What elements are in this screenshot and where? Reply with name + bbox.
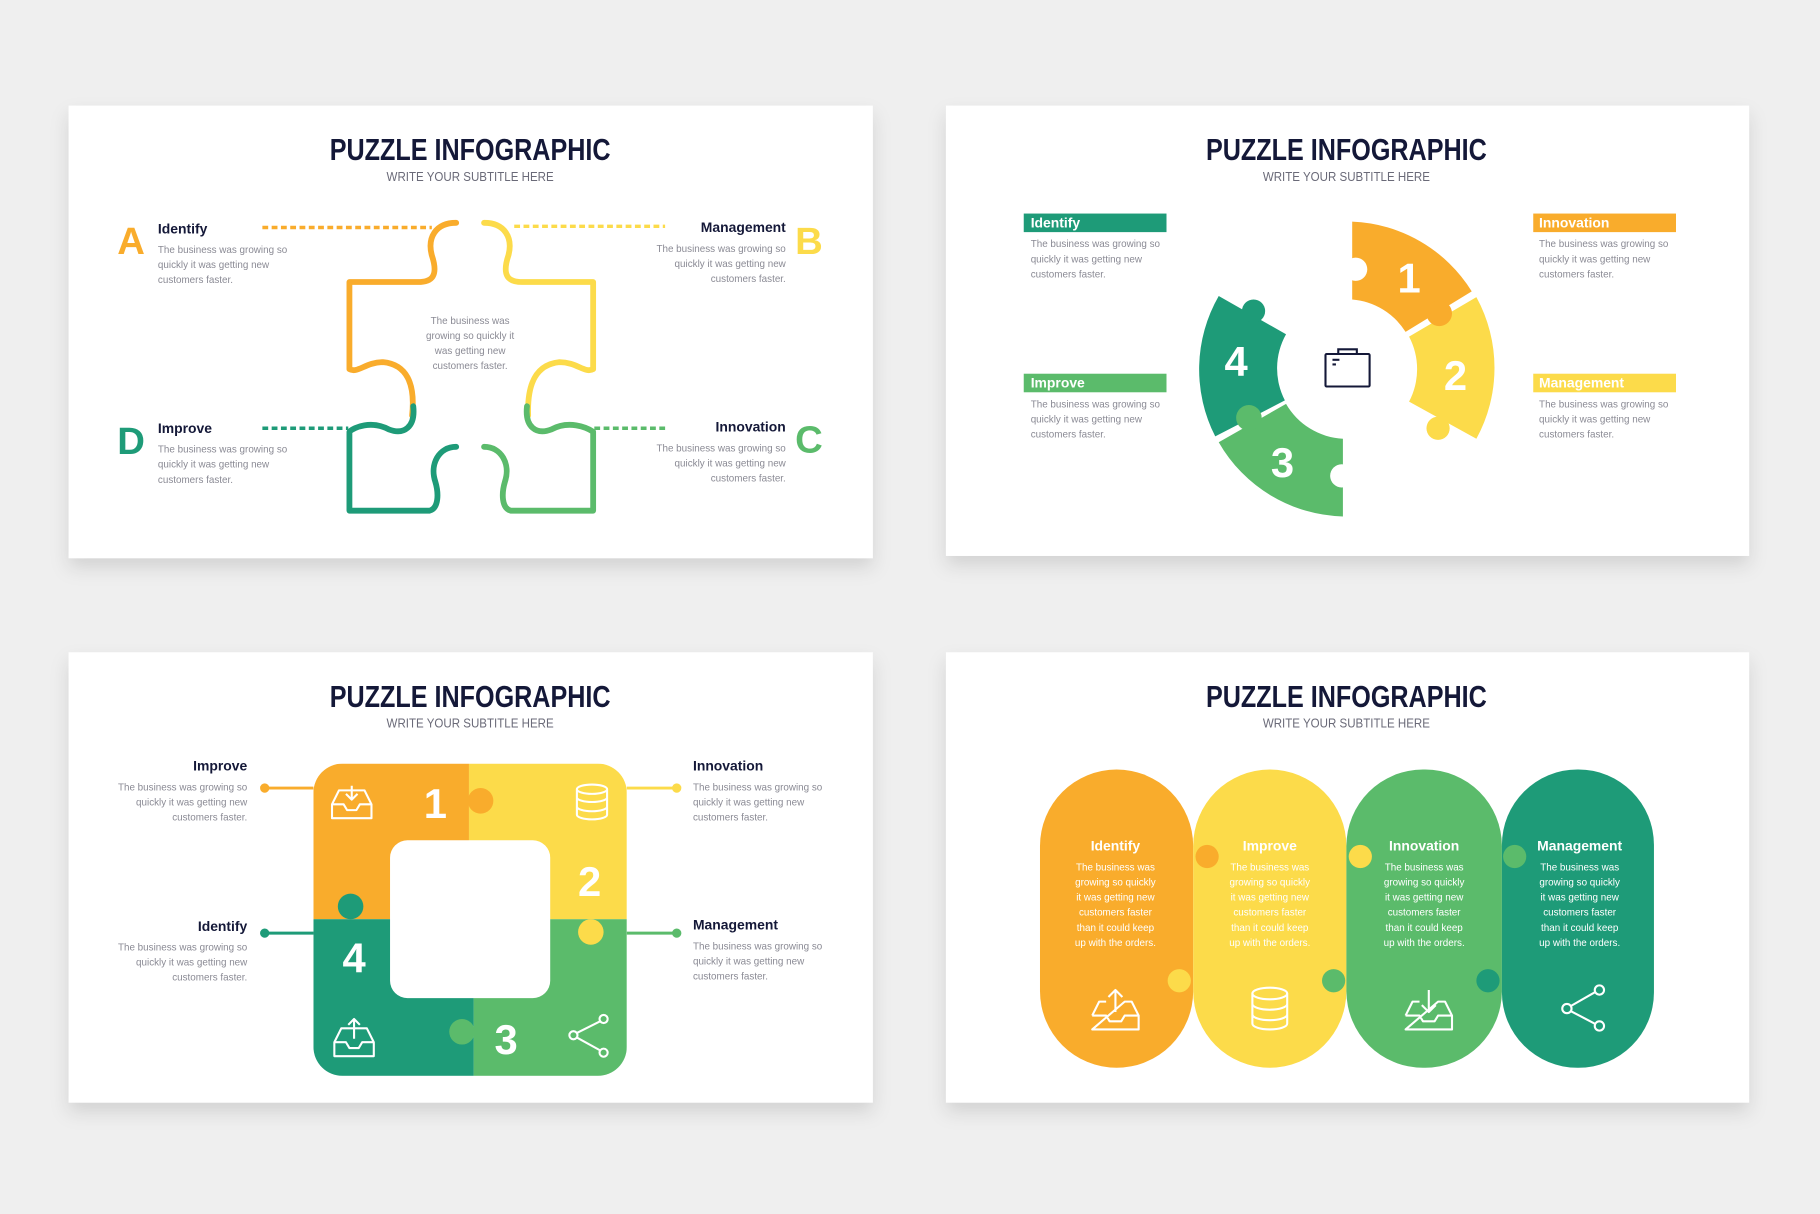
pill texts: The business was	[1540, 862, 1619, 873]
pill texts: The business was	[1076, 862, 1155, 873]
item Identify	[1024, 214, 1166, 280]
pill texts: it was getting new	[1540, 893, 1620, 904]
item Management: quickly it was getting new	[1539, 414, 1651, 425]
item C: C	[795, 419, 823, 462]
pill texts: up with the orders.	[1384, 938, 1465, 949]
pill texts: Management	[1537, 838, 1623, 854]
item Innovation: quickly it was getting new	[1539, 254, 1651, 265]
pill texts: up with the orders.	[1229, 938, 1310, 949]
pill texts: Identify	[1091, 838, 1140, 854]
item Management: quickly it was getting new	[693, 956, 805, 967]
item Management: The business was growing so	[1539, 399, 1669, 410]
item C	[656, 419, 823, 485]
center text: The business was	[431, 316, 510, 327]
item Identify: customers faster.	[172, 973, 247, 984]
item B: quickly it was getting new	[675, 259, 787, 270]
pill icons	[1092, 985, 1604, 1031]
pill texts: growing so quickly	[1384, 878, 1464, 889]
pill texts: customers faster	[1388, 908, 1461, 919]
item D: quickly it was getting new	[158, 460, 270, 471]
title: PUZZLE INFOGRAPHIC	[330, 134, 611, 167]
item Innovation	[627, 758, 823, 824]
square pieces	[313, 764, 627, 1076]
title: PUZZLE INFOGRAPHIC	[330, 681, 611, 714]
item Improve: Improve	[193, 758, 248, 774]
item Identify: Identify	[1031, 214, 1080, 230]
pill texts: than it could keep	[1386, 923, 1463, 934]
item D: D	[117, 420, 145, 463]
square pieces: 3	[494, 1016, 518, 1063]
item C: The business was growing so	[656, 443, 786, 454]
title: PUZZLE INFOGRAPHIC	[1206, 681, 1487, 714]
pill texts: customers faster	[1233, 908, 1307, 919]
item D	[117, 420, 288, 486]
item A: Identify	[158, 220, 208, 236]
item D: customers faster.	[158, 475, 233, 486]
item Innovation: Innovation	[1539, 214, 1609, 230]
subtitle: WRITE YOUR SUBTITLE HERE	[1263, 716, 1430, 731]
square pieces: 1	[424, 780, 447, 827]
center text: was getting new	[434, 346, 506, 357]
pill texts: The business was	[1230, 862, 1309, 873]
pill texts: customers faster	[1543, 908, 1617, 919]
item Identify: quickly it was getting new	[1031, 254, 1143, 265]
pill texts: up with the orders.	[1539, 938, 1620, 949]
item Innovation: customers faster.	[693, 813, 768, 824]
item Improve: quickly it was getting new	[1031, 414, 1143, 425]
item Identify: Identify	[198, 918, 248, 934]
pill texts: Innovation	[1389, 838, 1459, 854]
item B: customers faster.	[711, 274, 786, 285]
item Improve: The business was growing so	[118, 782, 248, 793]
item Innovation: quickly it was getting new	[693, 797, 805, 808]
pills	[1040, 769, 1654, 1068]
ring pieces: 3	[1271, 439, 1294, 486]
pill texts: growing so quickly	[1230, 878, 1310, 889]
item Management: customers faster.	[693, 972, 768, 983]
pill texts: growing so quickly	[1075, 878, 1156, 889]
pill texts: it was getting new	[1076, 893, 1155, 904]
item Identify: The business was growing so	[1031, 239, 1161, 250]
pill texts: up with the orders.	[1075, 938, 1156, 949]
center text: growing so quickly it	[426, 331, 514, 342]
panel: pill puzzle	[946, 652, 1749, 1103]
item Management: The business was growing so	[693, 941, 823, 952]
pill texts: than it could keep	[1231, 923, 1309, 934]
item Innovation: Innovation	[693, 758, 763, 774]
item B: Management	[701, 219, 786, 235]
item Improve: quickly it was getting new	[136, 797, 248, 808]
item B	[656, 219, 823, 285]
item Innovation	[1533, 214, 1676, 280]
pill texts: growing so quickly	[1539, 878, 1620, 889]
item Improve: customers faster.	[1031, 430, 1106, 441]
panel: outline puzzle	[69, 106, 873, 558]
item C: Innovation	[716, 419, 786, 435]
pill texts: than it could keep	[1541, 923, 1619, 934]
item Identify	[118, 918, 313, 984]
item Management: customers faster.	[1539, 430, 1614, 441]
item Identify: quickly it was getting new	[136, 958, 248, 969]
ring pieces: 2	[1444, 352, 1467, 399]
item Management: Management	[1539, 375, 1624, 391]
item Management: Management	[693, 917, 778, 933]
item D: The business was growing so	[158, 445, 288, 456]
item A: A	[117, 220, 145, 263]
item Management	[1533, 374, 1676, 441]
puzzle outline pieces	[349, 223, 593, 511]
item A	[117, 220, 288, 286]
pill texts: it was getting new	[1385, 893, 1464, 904]
item B: B	[795, 220, 823, 263]
ring pieces: 1	[1397, 254, 1421, 301]
item C: quickly it was getting new	[675, 459, 787, 470]
item Management	[627, 917, 823, 983]
item B: The business was growing so	[656, 244, 786, 255]
square pieces: 4	[342, 935, 366, 982]
item A: customers faster.	[158, 275, 233, 286]
item Improve: The business was growing so	[1031, 399, 1161, 410]
center text: customers faster.	[433, 361, 508, 372]
item Innovation: customers faster.	[1539, 269, 1614, 280]
item Identify: customers faster.	[1031, 269, 1106, 280]
center text	[426, 316, 514, 372]
item Improve: customers faster.	[172, 813, 247, 824]
item Improve	[1024, 374, 1166, 441]
subtitle: WRITE YOUR SUBTITLE HERE	[1263, 169, 1430, 184]
item Identify: The business was growing so	[118, 943, 248, 954]
subtitle: WRITE YOUR SUBTITLE HERE	[387, 716, 554, 731]
subtitle: WRITE YOUR SUBTITLE HERE	[387, 169, 554, 184]
pill texts: The business was	[1385, 862, 1464, 873]
icons	[332, 785, 608, 1057]
pill texts	[1075, 838, 1623, 949]
item Improve: Improve	[1031, 375, 1085, 391]
pill texts: it was getting new	[1231, 893, 1310, 904]
item Improve	[118, 758, 313, 824]
item D: Improve	[158, 420, 212, 436]
pill texts: Improve	[1243, 838, 1297, 854]
pill texts: than it could keep	[1077, 923, 1155, 934]
item C: customers faster.	[711, 474, 786, 485]
item Innovation: The business was growing so	[693, 782, 823, 793]
panel: square puzzle	[69, 652, 873, 1103]
pill texts: customers faster	[1079, 908, 1153, 919]
item A: The business was growing so	[158, 245, 288, 256]
square pieces: 2	[578, 858, 601, 905]
title: PUZZLE INFOGRAPHIC	[1206, 134, 1487, 167]
item Innovation: The business was growing so	[1539, 239, 1669, 250]
panel: ring puzzle	[946, 106, 1749, 556]
ring pieces	[1199, 222, 1494, 516]
item A: quickly it was getting new	[158, 260, 270, 271]
ring pieces: 4	[1225, 338, 1248, 385]
icon: briefcase	[1325, 349, 1370, 386]
